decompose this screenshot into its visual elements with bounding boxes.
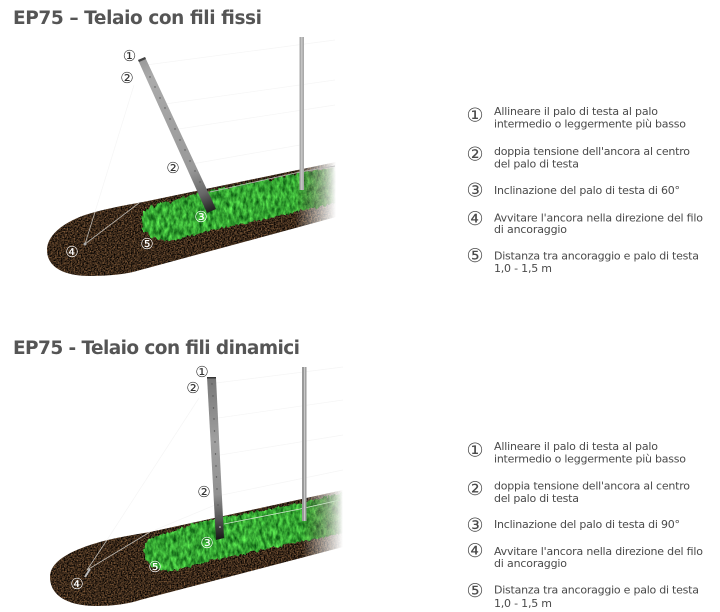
number markers: ⑤	[140, 235, 154, 253]
item 2: del palo di testa	[494, 492, 579, 505]
number markers: ④	[65, 243, 79, 261]
title: fixed wire frame: EP75 – Telaio con fili fissi	[13, 8, 262, 29]
item 2: del palo di testa	[494, 158, 579, 170]
title: dynamic wire frame: EP75 - Telaio con fili dinamici	[13, 338, 300, 359]
item 3: Inclinazione del palo di testa di 60°	[494, 184, 680, 197]
item 5	[466, 580, 699, 610]
guy wires and anchor	[85, 532, 150, 577]
item 5: Distanza tra ancoraggio e palo di testa	[494, 250, 699, 262]
item 1: intermedio o leggermente più basso	[494, 118, 686, 130]
item 2: ②	[466, 478, 484, 500]
intermediate post	[300, 37, 304, 190]
item 2: doppia tensione dell'ancora al centro	[494, 480, 690, 492]
number markers: ②	[166, 159, 180, 177]
faint wires	[95, 40, 335, 212]
item 5: Distanza tra ancoraggio e palo di testa	[494, 584, 699, 596]
faint wires	[107, 367, 343, 540]
soil bed	[50, 490, 343, 606]
illustration: fixed wire frame	[47, 37, 336, 276]
item 3: ③	[466, 180, 484, 202]
number markers	[70, 363, 214, 593]
item 1: Allineare il palo di testa al palo	[494, 440, 658, 453]
item 1	[466, 104, 686, 130]
item 5: 1,0 - 1,5 m	[494, 262, 552, 275]
illustration: dynamic wire frame	[50, 363, 343, 606]
number markers: ④	[70, 575, 84, 593]
number markers	[65, 47, 208, 261]
number markers: ②	[186, 379, 200, 397]
legend: fixed wire frame	[466, 104, 703, 275]
item 4: Avvitare l'ancora nella direzione del filo	[494, 212, 703, 224]
item 2: ②	[466, 144, 484, 166]
item 4	[466, 540, 703, 570]
item 3: ③	[466, 514, 484, 536]
item 5: 1,0 - 1,5 m	[494, 597, 552, 610]
item 3: Inclinazione del palo di testa di 90°	[494, 518, 680, 531]
item 5: ⑤	[466, 580, 484, 602]
number markers: ③	[194, 208, 208, 226]
grass strip	[141, 167, 336, 241]
item 4	[466, 208, 703, 236]
legend: dynamic wire frame	[466, 440, 703, 610]
ground wire	[210, 166, 335, 192]
item 4: di ancoraggio	[494, 557, 567, 570]
guy wires and anchor	[84, 203, 139, 246]
item 1: ①	[466, 440, 484, 462]
item 2	[466, 144, 690, 170]
item 1: intermedio o leggermente più basso	[494, 452, 686, 466]
item 1	[466, 440, 686, 466]
item 4: ④	[466, 208, 484, 230]
item 4: Avvitare l'ancora nella direzione del filo	[494, 545, 703, 558]
number markers: ⑤	[148, 558, 162, 576]
item 5: ⑤	[466, 245, 484, 267]
intermediate post	[302, 367, 306, 521]
item 1: Allineare il palo di testa al palo	[494, 105, 658, 118]
number markers: ②	[120, 69, 134, 87]
ground wire	[224, 500, 340, 524]
item 4: di ancoraggio	[494, 223, 567, 236]
head post, inclined	[138, 57, 216, 213]
item 2	[466, 478, 690, 505]
item 3	[466, 180, 680, 202]
grass strip	[144, 493, 343, 571]
number markers: ②	[197, 483, 211, 501]
item 4: ④	[466, 540, 484, 562]
item 2: doppia tensione dell'ancora al centro	[494, 145, 690, 158]
item 5	[466, 245, 699, 275]
number markers: ①	[123, 47, 136, 65]
soil bed	[47, 162, 336, 276]
head post, vertical	[207, 377, 224, 540]
number markers: ③	[200, 534, 214, 552]
item 1: ①	[466, 104, 484, 126]
item 3	[466, 514, 680, 536]
number markers: ①	[195, 363, 209, 381]
